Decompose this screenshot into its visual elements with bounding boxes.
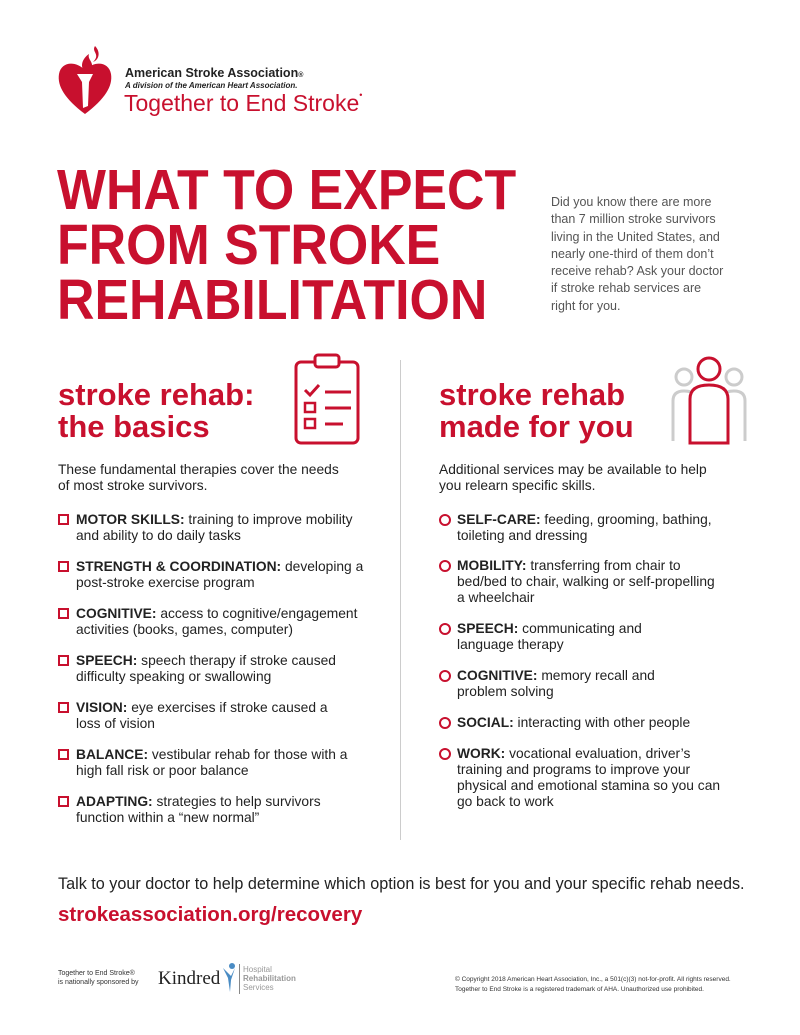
logo [58, 46, 362, 116]
item work: go back to work [457, 794, 554, 809]
item adapting [58, 794, 321, 825]
item speech: SPEECH: speech therapy if stroke caused [76, 653, 336, 668]
item speech: language therapy [457, 637, 564, 652]
icon: people [672, 356, 746, 444]
text: association name: American Stroke Association® [125, 66, 303, 80]
footer: sponsor: Hospital [243, 965, 272, 974]
item balance: high fall risk or poor balance [76, 763, 249, 778]
item motor: and ability to do daily tasks [76, 528, 241, 543]
footer: copyright: © Copyright 2018 American Heart Association, Inc., a 501(c)(3) not-for-profit. All rights reserved. [455, 976, 731, 983]
url: strokeassociation.org/recovery [58, 903, 362, 926]
footer: copyright: Together to End Stroke is a registered trademark of AHA. Unauthorized use prohibited. [455, 986, 704, 993]
item self-care: toileting and dressing [457, 528, 587, 543]
item speech: difficulty speaking or swallowing [76, 669, 271, 684]
item motor: MOTOR SKILLS: training to improve mobility [76, 512, 353, 527]
item balance: BALANCE: vestibular rehab for those with a [76, 747, 347, 762]
footer: sponsor: Rehabilitation [243, 974, 296, 983]
logo: Together to End Stroke• [124, 90, 362, 116]
icon: heart torch [58, 46, 112, 114]
heading: made for you [439, 377, 634, 444]
kindred logo: Kindred [158, 968, 220, 989]
item vision [58, 700, 328, 731]
title [57, 158, 516, 332]
item speech: SPEECH: communicating and [457, 621, 642, 636]
item balance [58, 747, 348, 778]
heading: basics: the basics [58, 409, 210, 444]
item self-care: SELF-CARE: feeding, grooming, bathing, [457, 512, 712, 527]
title: REHABILITATION [57, 268, 487, 332]
item mobility: a wheelchair [457, 590, 534, 605]
item cognitive: activities (books, games, computer) [76, 622, 293, 637]
item social: SOCIAL: interacting with other people [457, 715, 690, 730]
item cognitive: COGNITIVE: memory recall and [457, 668, 655, 683]
item cognitive: COGNITIVE: access to cognitive/engagement [76, 606, 357, 621]
item motor [58, 512, 353, 543]
title: FROM STROKE [57, 213, 440, 277]
right list [439, 512, 720, 809]
item mobility: bed/bed to chair, walking or self-propelling [457, 574, 715, 589]
left list [58, 512, 364, 825]
right intro: Additional services may be available to help you relearn specific skills. [439, 462, 707, 493]
item mobility: MOBILITY: transferring from chair to [457, 558, 681, 573]
item self-care [439, 512, 712, 543]
footer: sponsor: is nationally sponsored by [58, 979, 139, 986]
heading: made for you: made for you [439, 409, 634, 444]
icon: clipboard [294, 354, 360, 444]
intro text: Did you know there are more than 7 million stroke survivors living in the United States, and nearly one-third of them don’t receive rehab? Ask your doctor if stroke rehab services are right for you. [551, 195, 723, 313]
item speech [58, 653, 336, 684]
item cognitive [439, 668, 655, 699]
item adapting: function within a “new normal” [76, 810, 259, 825]
item work [439, 746, 720, 809]
item cognitive: problem solving [457, 684, 554, 699]
item strength: post-stroke exercise program [76, 575, 255, 590]
item work: WORK: vocational evaluation, driver’s [457, 746, 690, 761]
item work: training and programs to improve your [457, 762, 690, 777]
item strength: STRENGTH & COORDINATION: developing a [76, 559, 363, 574]
item vision: VISION: eye exercises if stroke caused a [76, 700, 328, 715]
heading: basics [58, 377, 254, 444]
closing text: Talk to your doctor to help determine which option is best for you and your specific rehab needs. [58, 875, 745, 893]
footer: sponsor: Services [243, 983, 274, 992]
item strength [58, 559, 364, 590]
item cognitive [58, 606, 358, 637]
item speech [439, 621, 642, 652]
heading: made for you: stroke rehab [439, 377, 625, 412]
item work: physical and emotional stamina so you can [457, 778, 720, 793]
footer: sponsor [58, 963, 296, 994]
item adapting: ADAPTING: strategies to help survivors [76, 794, 321, 809]
item mobility [439, 558, 715, 605]
logo: A division of the American Heart Association. [125, 81, 297, 90]
footer: copyright [455, 976, 731, 993]
title: WHAT TO EXPECT [57, 158, 516, 222]
heading: basics: stroke rehab: [58, 377, 254, 412]
footer: sponsor: Together to End Stroke® [58, 970, 135, 977]
left intro: These fundamental therapies cover the needs of most stroke survivors. [58, 462, 339, 493]
item vision: loss of vision [76, 716, 155, 731]
